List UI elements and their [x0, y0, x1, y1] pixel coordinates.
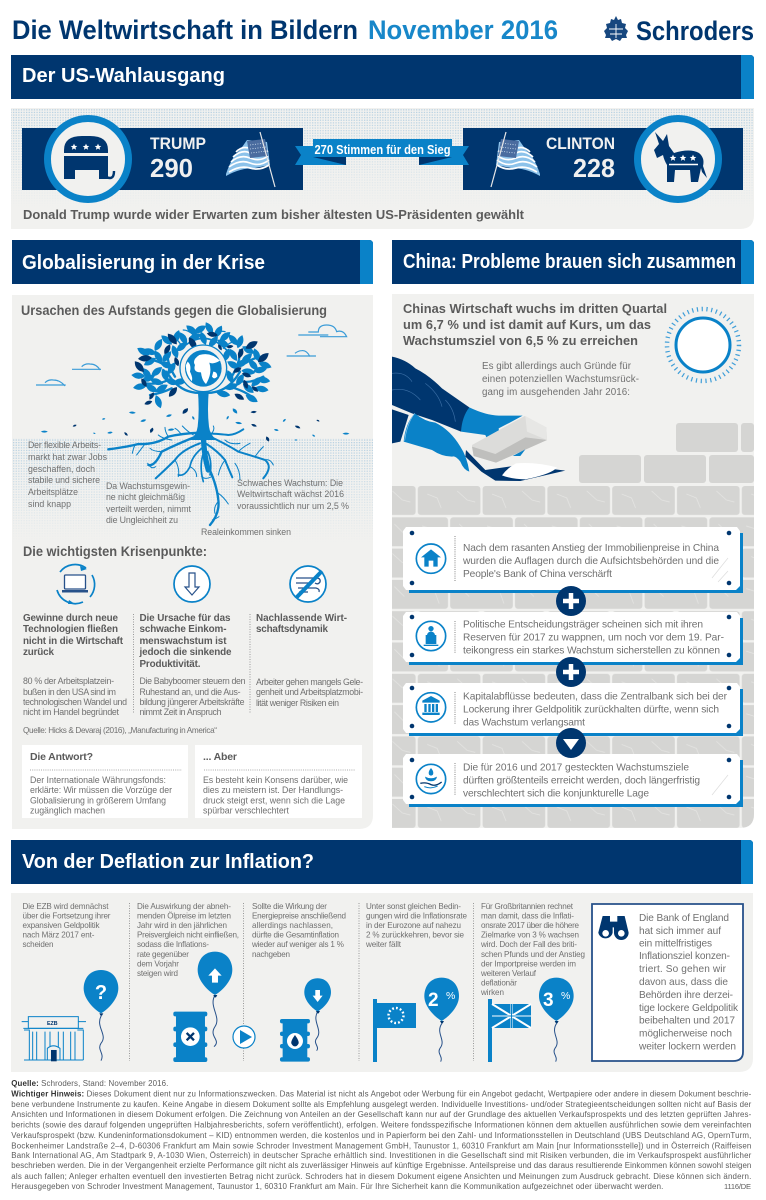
- text: unequal growth gains: verteilt werden, nimmt: [106, 504, 192, 514]
- column: eurozone: Unter sonst gleichen Bedin-: [366, 902, 461, 911]
- box: but: [195, 745, 362, 818]
- dividers: [134, 614, 250, 713]
- column: Great Britain: schen Pfunds und der Anstieg: [481, 950, 585, 959]
- text: flexible labour market: markt hat zwar Jobs: [28, 452, 108, 462]
- column: eurozone: gungen wird die Inflationsrate: [366, 912, 467, 920]
- election summary text: Donald Trump wurde wider Erwarten zum bisher ältesten US-Präsidenten gewählt: [23, 207, 525, 222]
- crisis point: dynamics: genheit und Arbeitsplatzmobi-: [256, 687, 363, 697]
- icon: sun: [667, 309, 739, 381]
- card 1: property: wurden die Auflagen durch die Aufsichtsbehörden und die: [462, 556, 719, 567]
- Clinton result bar: CLINTON: [546, 135, 615, 153]
- column: oil price: [137, 902, 255, 1062]
- column: Great Britain: der Importpreise werden im: [481, 960, 576, 968]
- illustration: clouds: [36, 325, 347, 386]
- globe: [180, 345, 227, 392]
- balloon: 2 percent: %: [446, 990, 455, 1002]
- icon: down arrow: [174, 566, 210, 602]
- box: the answer: Der Internationale Währungsfonds:: [30, 775, 166, 785]
- card 1: property: People's Bank of China verschärft: [463, 569, 612, 580]
- crisis point: technology: bußen in den USA sind im: [23, 687, 116, 697]
- box: the answer: Die Antwort?: [30, 751, 93, 763]
- crisis point: dynamics: schaftsdynamik: [256, 624, 328, 635]
- title: November 2016: [368, 15, 558, 45]
- column: oil price: Jahr wird in den jährlichen: [137, 921, 227, 930]
- icon: ECB building: EZB: [47, 1021, 58, 1027]
- column: energy prices: [251, 902, 346, 1062]
- column: oil price: dem Vorjahr: [137, 960, 179, 968]
- column: Great Britain: Für Großbritannien rechnet: [481, 902, 574, 911]
- column: Great Britain: man damit, dass die Inflati-: [481, 912, 574, 920]
- text: reasons: Es gibt allerdings auch Gründe für: [482, 361, 632, 372]
- China growth statement: Chinas Wirtschaft wuchs im dritten Quartal: [403, 301, 667, 316]
- China growth statement: Wachstumsziel von 6,5 % zu erreichen: [403, 333, 638, 348]
- card 4: growth targets: dürften größtenteils erreicht werden, doch längerfristig: [463, 776, 700, 786]
- crown leaves light: [131, 321, 273, 409]
- falling leaves dark: [72, 407, 320, 442]
- card 4: growth targets: [403, 754, 743, 807]
- column: oil price: rate gegenüber: [137, 950, 189, 959]
- disclaimer footer: Wichtiger Hinweis: Dieses Dokument dient nur zu Informationszwecken. Das Material ist nicht als Angebot oder Werbung für ein Angebot gedacht, Wertpapiere oder andere in diesem Dokument beschrie-: [11, 1090, 752, 1098]
- box: Bank of England: Inflationsziel konzen-: [639, 951, 730, 962]
- box: Bank of England: Die Bank of England: [639, 913, 729, 924]
- icon: plant in hand: [416, 764, 446, 794]
- disclaimer footer: beschrieben werden. Die in der Vergangenheit erzielte Performance gilt nicht als zuverlässiger Hinweis auf künftige Ergebnisse. Anteilspreise und das daraus resultierende Einkommen können sowohl steigen: [11, 1161, 751, 1170]
- icon: play arrow: [233, 1026, 255, 1048]
- box: but: druck steigt erst, wenn sich die Lage: [203, 796, 345, 806]
- crisis point: technology: nicht in die Wirtschaft: [23, 636, 124, 647]
- Trump result bar: 290: [150, 153, 193, 183]
- section heading: Globalisierung in der Krise: Globalisierung in der Krise: [22, 252, 265, 274]
- text: unequal growth gains: die Ungleichheit zu: [106, 515, 178, 525]
- card 3: capital flows: [403, 683, 743, 736]
- card 2: politics: [403, 612, 743, 665]
- icon: laptop with cycle arrows: [57, 565, 95, 604]
- crisis point: technology: Technologien fließen: [23, 624, 118, 635]
- text: flexible labour market: Der flexible Arbeits-: [28, 440, 101, 450]
- disclaimer footer: Bockenheimer Landstraße 2–4, D-60306 Frankfurt am Main sowie Schroder Investment Management GmbH, Taunustor 1, 60310 Frankfurt am Main [nur Informationsstelle]) und in Österreich (Raiffeisen: [11, 1141, 751, 1150]
- crisis point: dynamics: Nachlassende Wirt-: [256, 613, 347, 624]
- crown leaves dark: [132, 331, 271, 406]
- disclaimer footer: Quelle: Schroders, Stand: November 2016.: [11, 1079, 168, 1088]
- box: Bank of England: weiter lockern werden: [638, 1042, 736, 1052]
- panel: inflation: [11, 893, 753, 1072]
- box: Bank of England: tige lockere Geldpolitik: [639, 1003, 739, 1014]
- column: ECB: Die EZB wird demnächst: [22, 902, 109, 911]
- icon: lectern speaker: [416, 621, 446, 651]
- text: reasons: gang im ausgehenden Jahr 2016:: [482, 387, 630, 398]
- box: but: spürbar verschlechtert: [203, 806, 290, 816]
- heading: crisis points: Die wichtigsten Krisenpunkte:: [23, 543, 207, 559]
- text: unequal growth gains: [106, 481, 192, 525]
- text: weak growth: Weltwirtschaft wächst 2016: [237, 489, 344, 499]
- section heading: Der US-Wahlausgang: [11, 55, 754, 99]
- crisis point: productivity: nimmt Zeit in Anspruch: [140, 707, 222, 717]
- connector: result arrow: [556, 728, 586, 758]
- column: energy prices: allerdings nachlassen,: [252, 921, 333, 930]
- text: flexible labour market: [28, 440, 108, 509]
- balloon: 3 percent: [539, 978, 574, 1062]
- column: eurozone: in der Eurozone auf nahezu: [366, 921, 461, 930]
- column: oil price: Die Auswirkung der abneh-: [137, 902, 231, 911]
- box: Bank of England: [592, 904, 743, 1061]
- crisis point: dynamics: lität weniger Risiken ein: [256, 698, 339, 708]
- icon: oil barrel with drop: [280, 1019, 310, 1062]
- icon: Republican elephant: [48, 118, 128, 200]
- box: Bank of England: triert. So gehen wir: [639, 964, 727, 975]
- balloon: question mark: ?: [95, 982, 107, 1004]
- card 4: growth targets: verschlechtert sich die konjunkturelle Lage: [463, 788, 649, 800]
- Trump result bar: TRUMP: [150, 135, 206, 153]
- panel: US election: [11, 108, 754, 229]
- balloon: down arrow: [304, 978, 331, 1051]
- title: Die Weltwirtschaft in Bildern: [12, 15, 358, 45]
- balloon: 3 percent: 3: [543, 990, 554, 1011]
- icon: bank: [416, 693, 446, 722]
- column: oil price: sodass die Inflations-: [137, 940, 209, 949]
- disclaimer footer: Herausgegeben von Schroder Investment Management, Taunustor 1, 60310 Frankfurt am Main. Für Ihre Sicherheit kann die Kommunikation aufgezeichnet oder überwacht werden.: [11, 1182, 663, 1191]
- column: Great Britain: weiteren Verlauf: [480, 969, 537, 978]
- crisis point: productivity: Die Babyboomer steuern den: [140, 676, 246, 686]
- box: but: ... Aber: [203, 751, 237, 763]
- column: ECB: scheiden: [22, 940, 54, 949]
- card 2: politics: teikongress ein starkes Wachstum sicherstellen zu können: [463, 646, 720, 656]
- ribbon: 270 votes to win: [295, 139, 469, 165]
- card 4: growth targets: Die für 2016 und 2017 gesteckten Wachstumsziele: [463, 762, 689, 774]
- panel: China: [392, 294, 754, 828]
- box: Bank of England: ein mittelfristiges: [639, 938, 712, 950]
- column: Great Britain: [480, 902, 585, 1062]
- section heading: Deflation to inflation: [11, 840, 753, 884]
- icon: binoculars: [598, 916, 629, 940]
- balloon: 2 percent: 2: [428, 990, 439, 1011]
- crisis point: productivity: Ruhestand an, und die Aus-: [140, 687, 241, 697]
- box: Bank of England: möglicherweise noch: [639, 1028, 732, 1040]
- column: ECB: [22, 902, 118, 1061]
- column: energy prices: dürfte die Gesamtinflation: [252, 930, 339, 940]
- Trump result bar: [22, 128, 303, 190]
- card 3: capital flows: Kapitalabflüsse bedeuten, dass die Zentralbank sich bei der: [463, 692, 728, 702]
- crisis point: dynamics: Arbeiter gehen mangels Gele-: [256, 677, 363, 687]
- box: the answer: [22, 745, 188, 818]
- crisis point: technology: Gewinne durch neue: [23, 613, 118, 624]
- box: Bank of England: davon aus, dass die: [639, 977, 728, 988]
- column: eurozone: weiter fällt: [365, 940, 402, 949]
- box: Bank of England: beibehalten und 2017: [639, 1016, 735, 1026]
- crisis point: technology: nicht im Handel begründet: [23, 707, 120, 717]
- crisis point: dynamics: [256, 613, 363, 708]
- column: Great Britain: wird. Doch der Fall des briti-: [480, 940, 577, 949]
- box: the answer: zugänglich machen: [30, 806, 105, 816]
- section heading: China: [392, 240, 754, 284]
- Clinton result bar: [463, 128, 743, 190]
- crisis point: productivity: schwache Einkom-: [140, 624, 226, 635]
- card 2: politics: Politische Entscheidungsträger scheinen sich mit ihren: [463, 620, 703, 630]
- heading: causes: Ursachen des Aufstands gegen die Globalisierung: [21, 302, 327, 318]
- box: Bank of England: hat sich immer auf: [639, 926, 721, 937]
- text: reasons: einen potenziellen Wachstumsrück-: [482, 374, 639, 385]
- connector: plus: [556, 657, 586, 687]
- box: Bank of England: Behörden ihre derzei-: [639, 990, 733, 1001]
- text: flexible labour market: sind knapp: [28, 499, 71, 509]
- column: ECB: über die Fortsetzung ihrer: [22, 912, 111, 920]
- disclaimer footer: Ansichten und Informationen in diesem Dokument erfolgen. Die Zeichnung von Anteilen an der Gesellschaft kann nur auf der Grundlage des aktuellen Verkaufsprospekts und des letzten geprüften Jahres-: [11, 1110, 752, 1119]
- text: weak growth: [237, 478, 349, 511]
- disclaimer footer: als auch fallen; Anleger erhalten eventuell den investierten Betrag nicht zurück. Schroders hat in diesem Dokument eigene Ansichten und Meinungen zum Ausdruck gebracht. Diese können sich ändern.: [11, 1172, 751, 1181]
- card 2: politics: Reserven für 2017 zu wappnen, um noch vor dem 19. Par-: [463, 632, 724, 644]
- crisis point: productivity: menswachstum ist: [140, 636, 227, 647]
- illustration: globe tree: [41, 321, 349, 525]
- crisis point: technology: [23, 613, 127, 717]
- column: energy prices: Sollte die Wirkung der: [252, 902, 327, 911]
- text: weak growth: Schwaches Wachstum: Die: [237, 478, 343, 488]
- text: flexible labour market: Arbeitsplätze: [28, 487, 78, 497]
- column: Great Britain: Zielmarke von 3 % wachsen: [481, 930, 579, 940]
- card 1: property: Nach dem rasanten Anstieg der Immobilienpreise in China: [463, 543, 719, 554]
- column: Great Britain: wirken: [480, 988, 504, 997]
- crisis point: productivity: Die Ursache für das: [140, 613, 231, 624]
- trunk and branches: [143, 330, 263, 440]
- disclaimer footer: Bank International AG, Am Stadtpark 9, A-1030 Wien, Österreich) in deutscher Sprache erhältlich sind. Investitionen in die Gesellschaft sind mit Risiken verbunden, die im Verkaufsprospekt ausführlicher: [11, 1151, 752, 1160]
- crisis point: productivity: bildung jüngerer Arbeitskräfte: [140, 697, 245, 707]
- disclaimer footer: bene verbundene Instrumente zu kaufen. Keine Angabe in diesem Dokument sollte als Empfehlung ausgelegt werden. Individuelle Investitions- und/oder Strategieentscheidungen sollten nicht auf Basis der: [11, 1100, 752, 1109]
- China growth statement: um 6,7 % und ist damit auf Kurs, um das: [403, 317, 651, 332]
- crisis point: technology: 80 % der Arbeitsplatzein-: [23, 676, 114, 686]
- crisis point: technology: zurück: [23, 647, 54, 658]
- column: energy prices: wieder auf weniger als 1 %: [251, 940, 344, 949]
- column: eurozone: 2 % zurückkehren, bevor sie: [366, 930, 464, 940]
- balloon: 3 percent: %: [561, 990, 570, 1002]
- text: flexible labour market: stabile und sichere: [28, 475, 100, 485]
- panel: globalisation: [12, 295, 373, 829]
- illustration: hands laying brick: [392, 357, 565, 481]
- text: real incomes: Realeinkommen sinken: [201, 527, 291, 537]
- column: Great Britain: deflationär: [481, 978, 517, 988]
- icon: house: [416, 544, 446, 573]
- brick wall: [392, 423, 754, 828]
- crisis point: technology: technologischen Wandel und: [23, 697, 127, 707]
- card 3: capital flows: Lockerung ihrer Geldpolitik zurückhalten dürfte, wenn sich: [463, 704, 719, 716]
- icon: Democrat donkey: [638, 118, 718, 200]
- China growth statement: [403, 301, 667, 348]
- section heading: Globalisierung in der Krise: [12, 240, 373, 284]
- column: ECB: expansiven Geldpolitik: [22, 921, 100, 930]
- box: the answer: Globalisierung in größerem Umfang: [30, 796, 166, 806]
- card 1: property: [403, 527, 743, 593]
- crisis point: productivity: jedoch die sinkende: [138, 647, 232, 658]
- disclaimer footer: Verkaufsprospekt (bzw. Kundeninformationsdokument – KID) entnommen werden, die kostenlos und in Papierform bei den Zahl- und Informationsstellen in Deutschland (UBS Deutschland AG, OpernTurm,: [11, 1131, 751, 1140]
- card 3: capital flows: das Wachstum verlangsamt: [463, 718, 585, 728]
- Clinton result bar: 228: [573, 153, 615, 183]
- ribbon: 270 votes to win: 270 Stimmen für den Sieg: [314, 143, 450, 157]
- section heading: Deflation to inflation: Von der Deflation zur Inflation?: [22, 850, 314, 873]
- icon: EU flag: [373, 999, 416, 1062]
- icon: oil barrel with cross: [173, 1012, 207, 1062]
- column: Great Britain: onsrate 2017 über die höhere: [481, 921, 579, 930]
- icon: wind crossed out: [290, 566, 326, 602]
- box: but: dies zu meistern ist. Der Handlungs-: [203, 785, 343, 795]
- text: flexible labour market: geschaffen, doch: [28, 464, 95, 474]
- column: oil price: menden Ölpreise im letzten: [137, 912, 231, 920]
- disclaimer footer: 1116/DE: [724, 1182, 751, 1191]
- column: oil price: steigen wird: [137, 969, 178, 978]
- falling leaves light: [41, 408, 349, 441]
- text: reasons: [482, 361, 639, 398]
- text: unequal growth gains: ne nicht gleichmäßig: [106, 492, 185, 502]
- disclaimer footer: berichts (sowie des darauf folgenden ungeprüften Halbjahresberichts, sofern veröffentlicht), erfolgen. Weitere fondsspezifische Informationen können dem aktuellen ausführlichen sowie dem vereinfachten: [11, 1120, 751, 1130]
- box: but: Es besteht kein Konsens darüber, wie: [203, 775, 348, 785]
- column: energy prices: nachgeben: [252, 950, 290, 959]
- icon: UK flag: [488, 999, 531, 1062]
- column: energy prices: Energiepreise anschließend: [252, 912, 346, 920]
- section heading: Der US-Wahlausgang: Der US-Wahlausgang: [22, 65, 225, 87]
- icon: ECB building: [22, 1017, 86, 1061]
- source note: Quelle: Hicks & Devaraj (2016), „Manufacturing in America“: [23, 726, 217, 735]
- roots: [108, 426, 273, 525]
- balloon: 2 percent: [424, 978, 459, 1062]
- column: ECB: nach März 2017 ent-: [22, 930, 95, 940]
- title: [12, 15, 558, 45]
- box: the answer: erklärte: Wir müssen die Vorzüge der: [30, 785, 172, 795]
- balloon: question mark: [84, 970, 118, 1061]
- disclaimer footer: [11, 1079, 752, 1191]
- crisis point: productivity: Produktivität.: [140, 659, 201, 670]
- crisis point: productivity: [138, 613, 246, 717]
- column: eurozone: [365, 902, 467, 1062]
- logo: Schroders: Schroders: [636, 16, 754, 46]
- text: weak growth: voraussichtlich nur um 2,5 %: [237, 501, 349, 511]
- balloon: up arrow: [198, 952, 232, 1047]
- connector: plus: [556, 586, 586, 616]
- text: unequal growth gains: Da Wachstumsgewin-: [106, 481, 190, 491]
- column: oil price: Preisvergleich nicht einfließen,: [137, 930, 239, 940]
